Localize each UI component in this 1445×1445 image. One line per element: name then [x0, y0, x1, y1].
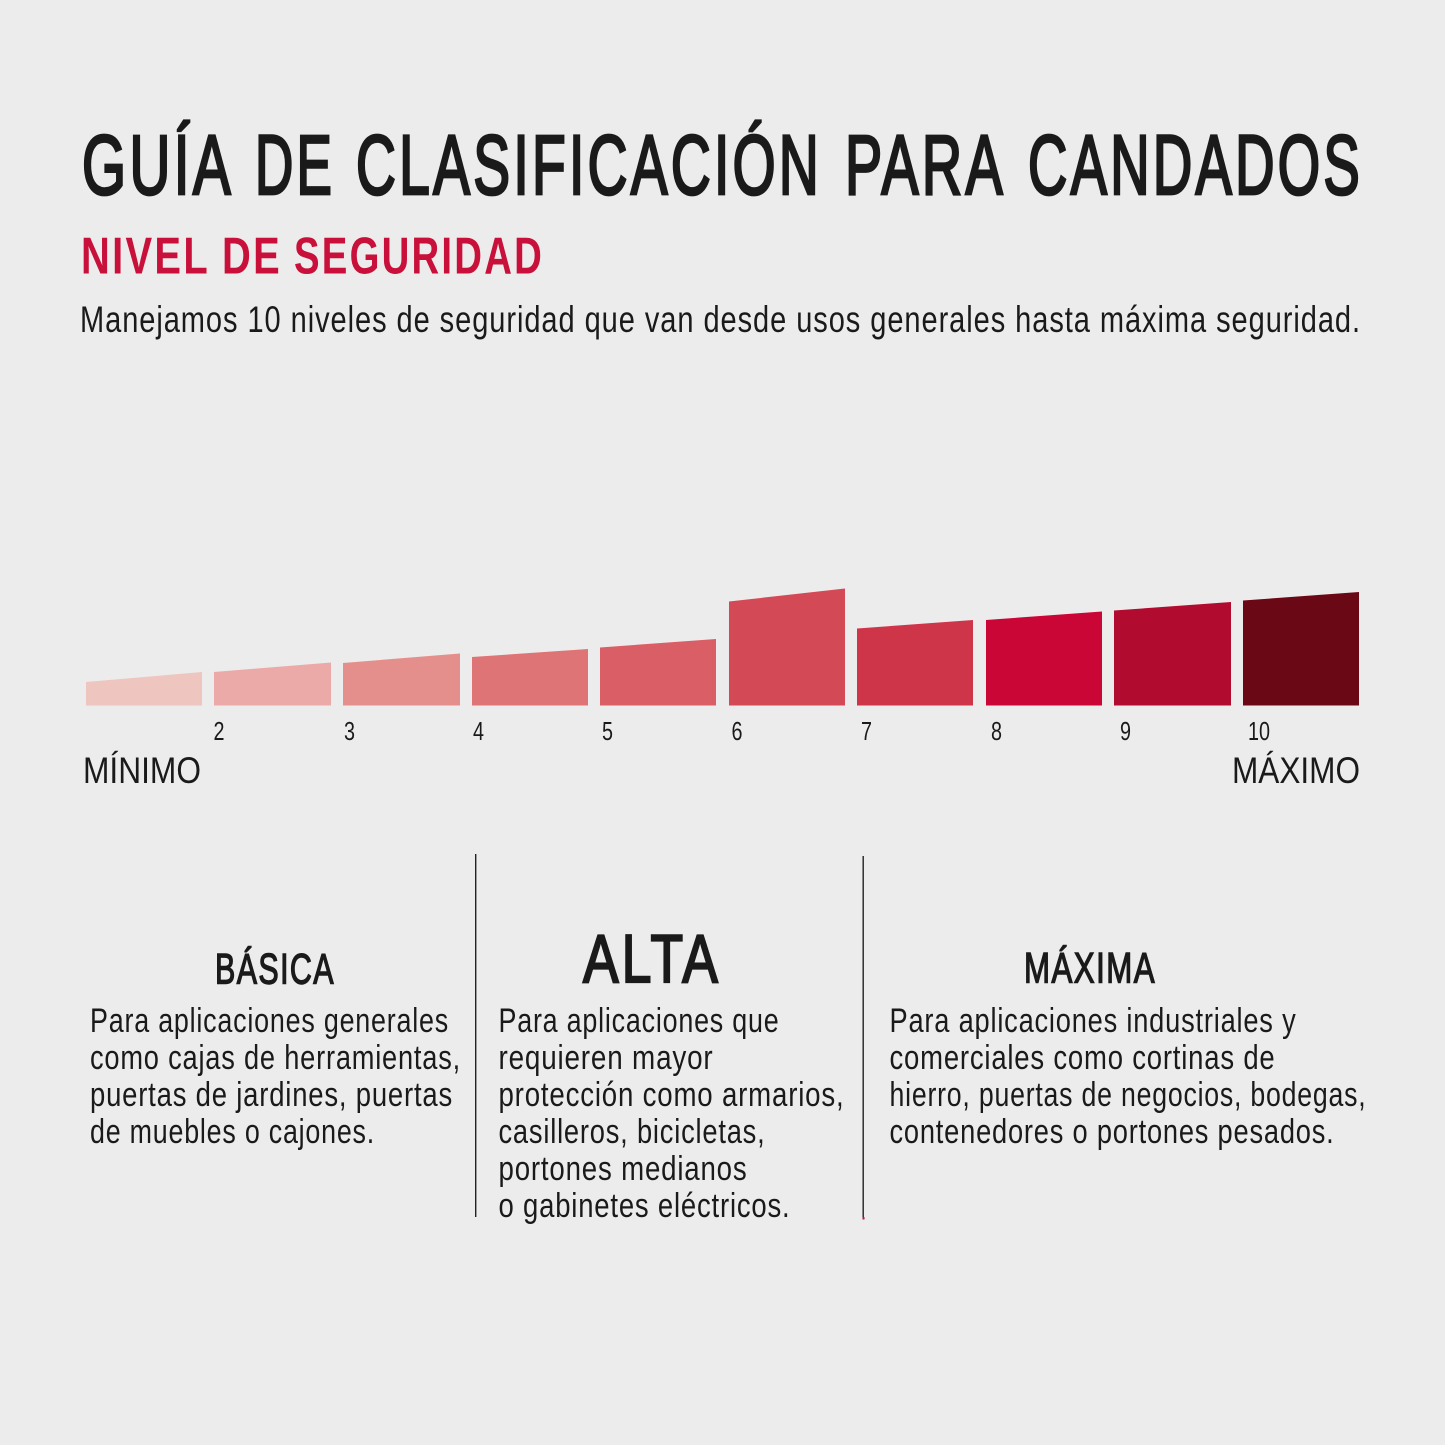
text: alta: protección como armarios,	[498, 1076, 844, 1114]
text: alta: portones medianos	[498, 1150, 748, 1188]
text: máxima: contenedores o portones pesados.	[890, 1113, 1334, 1151]
scale numbers: 3	[344, 716, 355, 746]
column: alta	[498, 921, 844, 1225]
text: máxima	[890, 1002, 1366, 1151]
scale numbers: 8	[991, 716, 1002, 746]
text: básica: Para aplicaciones generales	[90, 1002, 449, 1040]
scale numbers: 2	[214, 716, 224, 746]
divider left	[475, 854, 476, 1217]
text: alta: Para aplicaciones que	[498, 1002, 780, 1040]
bar 4	[472, 649, 588, 706]
column: básica	[90, 946, 461, 1151]
bar 10	[1243, 592, 1359, 706]
text: alta: o gabinetes eléctricos.	[498, 1187, 790, 1225]
title: CLASIFICACIÓN	[356, 118, 822, 212]
heading: básica: BÁSICA	[215, 946, 335, 994]
subtitle: NIVEL	[81, 228, 210, 286]
scale numbers	[214, 716, 1270, 746]
column: máxima	[890, 944, 1366, 1151]
bar 9	[1114, 602, 1231, 706]
scale numbers: 6	[732, 716, 742, 746]
title: GUÍA	[82, 118, 234, 212]
title: DE	[255, 118, 335, 212]
text: alta: casilleros, bicicletas,	[498, 1113, 766, 1151]
text: básica: como cajas de herramientas,	[90, 1039, 461, 1077]
heading: alta: ALTA	[583, 921, 721, 997]
scale numbers: 9	[1120, 716, 1131, 746]
label: minimum: MÍNIMO	[83, 750, 201, 791]
bar 2	[214, 662, 331, 706]
bar 1	[86, 672, 202, 706]
bar 8	[986, 612, 1102, 706]
text: básica: de muebles o cajones.	[90, 1113, 375, 1151]
text: alta	[498, 1002, 844, 1225]
text: básica	[90, 1002, 461, 1151]
label: maximum: MÁXIMO	[1232, 750, 1360, 791]
scale numbers: 5	[602, 716, 613, 746]
text: básica: puertas de jardines, puertas	[90, 1076, 453, 1114]
subtitle	[81, 228, 544, 286]
text: máxima: Para aplicaciones industriales y	[890, 1002, 1296, 1040]
subtitle: DE	[222, 228, 282, 286]
scale numbers: 7	[861, 716, 872, 746]
bar 3	[343, 654, 460, 706]
heading: máxima: MÁXIMA	[1024, 944, 1156, 992]
bar 7	[857, 620, 973, 706]
subtitle: SEGURIDAD	[294, 228, 544, 286]
bar chart: security levels	[86, 588, 1359, 706]
title	[82, 118, 1363, 212]
divider right	[862, 856, 864, 1219]
scale numbers: 10	[1248, 716, 1270, 746]
text: alta: requieren mayor	[498, 1039, 714, 1077]
bar 5	[600, 639, 716, 706]
title: PARA	[845, 118, 1006, 212]
bar 6	[729, 588, 845, 706]
scale numbers: 4	[473, 716, 484, 746]
text: máxima: comerciales como cortinas de	[890, 1039, 1276, 1077]
divider right red tip	[862, 1217, 864, 1220]
